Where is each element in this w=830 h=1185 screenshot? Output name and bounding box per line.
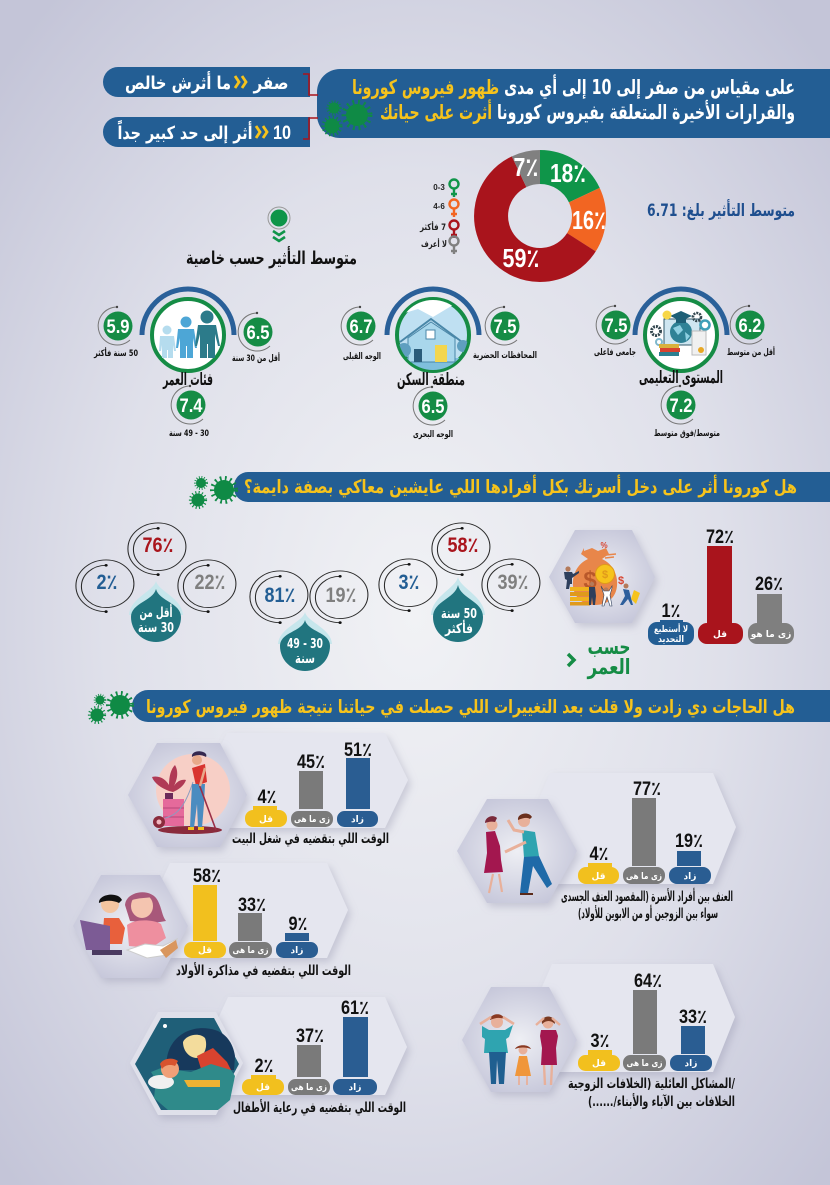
- stat: university: 7.5: [604, 316, 628, 337]
- bar: increased 33: 33٪: [679, 1007, 707, 1028]
- stat: upper egypt: 6.7: [350, 317, 372, 338]
- age group: 30 to 49: 81٪: [264, 584, 296, 607]
- stat: lower egypt: الوجه البحرى: [413, 430, 453, 440]
- stat: urban governorates: 7.5: [494, 317, 517, 338]
- bar: increased 19: زاد: [684, 872, 696, 882]
- bar: same 77: 77٪: [633, 779, 661, 800]
- stat: university: [594, 305, 636, 358]
- bar: increased 33: [670, 1007, 712, 1071]
- bar: cannot determine: لا أستطيع: [654, 623, 688, 635]
- icon: arguing family: [480, 1014, 560, 1085]
- icon: woman cleaning: [152, 751, 230, 834]
- bar: decreased 2: قل: [256, 1083, 270, 1093]
- donut chart: [491, 152, 606, 273]
- stat: intermediate: 7.2: [670, 396, 692, 417]
- stat: 30 to 49: 7.4: [180, 396, 203, 417]
- bar: same 37: زى ما هى: [291, 1083, 327, 1093]
- bar: decreased 4: قل: [592, 872, 606, 882]
- changes question banner: [90, 690, 830, 722]
- age group: under 30: 30 سنة: [138, 620, 174, 636]
- income bar chart: [648, 527, 794, 645]
- scale key: zero: [103, 67, 310, 97]
- icon: money hexagon: $: [583, 567, 597, 594]
- scale key: ten: 10: [273, 123, 291, 144]
- bar: decreased 4: قل: [259, 815, 273, 825]
- bar: same 37: 37٪: [296, 1026, 324, 1047]
- group: education: [594, 289, 775, 439]
- age group: 30 to 49: [250, 571, 368, 671]
- age group: 30 to 49: 30 - 49: [287, 636, 323, 652]
- group: education: المستوى التعليمى: [639, 368, 723, 388]
- donut legend: [419, 180, 458, 254]
- stat: 50 plus: 5.9: [106, 317, 130, 338]
- bar: same 37: [288, 1026, 330, 1095]
- bar: cannot determine: التحديد: [658, 635, 684, 645]
- by age label: العمر: [587, 655, 630, 679]
- icon: money hexagon: $: [618, 575, 624, 587]
- income question banner: [191, 472, 830, 507]
- bar: decreased 4: 4٪: [590, 844, 608, 865]
- panel: family problems: الخلافات بين الآباء والأبناء/......): [588, 1093, 735, 1110]
- heading: average impact by characteristic: [186, 207, 357, 269]
- main question banner: [303, 69, 830, 139]
- stat: 50 plus: 50 سنة فأكثر: [93, 347, 138, 359]
- bar: increased 19: 19٪: [675, 831, 703, 852]
- icon: mother and child studying: [80, 892, 178, 958]
- group: age: [93, 289, 280, 439]
- bar: same 45: زى ما هى: [294, 815, 330, 825]
- virus icons: [191, 478, 235, 507]
- bar: same: 26٪: [755, 574, 783, 595]
- icon: money hexagon: [549, 530, 655, 623]
- bar: increased 33: زاد: [685, 1059, 697, 1069]
- stat: lower egypt: 6.5: [422, 397, 445, 418]
- stat: intermediate: [654, 385, 720, 439]
- panel: family problems: [462, 964, 735, 1110]
- bar: decreased: قل: [713, 630, 727, 640]
- bar: same 77: [623, 779, 665, 884]
- by age label: حسب: [588, 635, 630, 659]
- stat: university: جامعى فاعلى: [594, 348, 636, 358]
- donut legend: لا أعرف: [421, 238, 447, 250]
- age group: under 30: أقل من: [140, 604, 172, 621]
- donut chart: 16٪: [572, 205, 606, 235]
- bar: same 64: 64٪: [634, 971, 662, 992]
- panel: childcare: الوقت اللي بتقضيه في رعاية الأطفال: [233, 1099, 406, 1116]
- age group: 50 plus: 3٪: [398, 571, 420, 594]
- bar: decreased 2: 2٪: [254, 1056, 274, 1077]
- scale key: zero: صفر: [253, 73, 288, 94]
- icon: violence scene: [484, 813, 552, 895]
- scale key: ten: أثر إلى حد كبير جداً: [117, 120, 253, 144]
- bar: same 77: زى ما هى: [626, 872, 662, 882]
- group: residence: منطقة السكن: [397, 370, 465, 390]
- stat: upper egypt: [341, 306, 381, 362]
- panel: housework: [128, 733, 408, 847]
- age group: 50 plus: فأكثر: [444, 620, 473, 637]
- age group: 50 plus: 39٪: [498, 571, 528, 594]
- bar: increased 51: [337, 740, 378, 827]
- age group: 30 to 49: 19٪: [326, 584, 356, 607]
- bar: cannot determine: 1٪: [662, 601, 680, 622]
- group: residence: [341, 289, 537, 440]
- stat: urban governorates: المحافظات الحضرية: [473, 351, 537, 361]
- age group: under 30: 22٪: [194, 571, 226, 594]
- icon: three people: [159, 310, 220, 358]
- donut legend: 7 فأكثر: [419, 221, 446, 233]
- donut chart: 7٪: [514, 152, 538, 182]
- bar: decreased: [698, 527, 743, 644]
- bar: same: زى ما هو: [750, 630, 791, 640]
- age group: 50 plus: 50 سنة: [441, 606, 477, 622]
- bar: decreased 3: [578, 1031, 620, 1071]
- bar: increased 61: زاد: [349, 1083, 361, 1093]
- panel: housework: الوقت اللي بتقضيه في شغل البيت: [232, 831, 389, 847]
- stat: 30 to 49: [169, 385, 209, 439]
- stat: upper egypt: الوجه القبلى: [343, 352, 381, 362]
- bar: same 33: زى ما هى: [232, 946, 268, 956]
- bar: increased 51: 51٪: [344, 740, 372, 761]
- bar: decreased 3: 3٪: [590, 1031, 610, 1052]
- stat: under 30: [232, 312, 280, 364]
- heading: average impact by characteristic: متوسط التأثير حسب خاصية: [186, 246, 357, 269]
- bar: same 64: زى ما هى: [626, 1059, 662, 1069]
- panel: children's study: [73, 863, 351, 979]
- stat: below intermediate: 6.2: [738, 316, 762, 337]
- age group: under 30: [76, 523, 236, 642]
- bar: same 33: 33٪: [238, 895, 266, 916]
- virus icons: [90, 694, 131, 722]
- icon: money hexagon: %: [600, 541, 608, 550]
- scale key: zero: ما أثرش خالص: [125, 71, 231, 94]
- stat: under 30: 6.5: [246, 323, 270, 344]
- donut chart: 18٪: [550, 158, 586, 188]
- bar: increased 9: [276, 914, 318, 958]
- panel: childcare: [130, 997, 407, 1116]
- by age label: [568, 635, 630, 679]
- bar: same 45: [291, 752, 333, 827]
- panel: children's study: الوقت اللي بتقضيه في مذاكرة الأولاد: [176, 962, 351, 979]
- bar: same 64: [623, 971, 666, 1071]
- bar: decreased 4: [578, 844, 619, 884]
- stat: below intermediate: أقل من متوسط: [727, 346, 775, 358]
- age group: 30 to 49: سنة: [295, 651, 315, 667]
- age group: 50 plus: [379, 523, 540, 642]
- stat: urban governorates: [473, 306, 537, 361]
- stat: intermediate: متوسط/فوق متوسط: [654, 429, 720, 439]
- bar: same 45: 45٪: [297, 752, 325, 773]
- donut chart: 59٪: [502, 243, 540, 273]
- bar: decreased 2: [242, 1056, 284, 1095]
- bar: same 33: [229, 895, 272, 958]
- bar: decreased: 72٪: [706, 527, 734, 548]
- bar: decreased 3: قل: [592, 1059, 606, 1069]
- age group: 50 plus: 58٪: [448, 534, 478, 557]
- panel: family violence: [457, 773, 736, 922]
- bar: cannot determine: [648, 601, 694, 645]
- stat: 50 plus: [93, 306, 138, 359]
- donut legend: 0-3: [433, 183, 445, 192]
- bar: increased 61: [333, 998, 377, 1095]
- icon: house: [399, 300, 468, 370]
- stat: 30 to 49: 30 - 49 سنة: [169, 429, 209, 439]
- bar: decreased 58: [184, 866, 226, 958]
- icon: money hexagon: $: [602, 569, 608, 581]
- bar: increased 61: 61٪: [341, 998, 369, 1019]
- bar: decreased 58: 58٪: [193, 866, 221, 887]
- stat: under 30: أقل من 30 سنة: [232, 352, 280, 364]
- bar: increased 9: 9٪: [288, 914, 308, 935]
- icon: mother and sleeping child: [135, 1018, 239, 1110]
- bar: increased 19: [669, 831, 711, 884]
- icon: education: [652, 310, 710, 356]
- group: age: فئات العمر: [162, 370, 213, 390]
- bar: same: [748, 574, 794, 644]
- age group: under 30: 76٪: [142, 534, 174, 557]
- bar: increased 51: زاد: [351, 815, 364, 825]
- bar: decreased 4: [245, 787, 287, 827]
- scale key: ten: [103, 117, 310, 147]
- bar: decreased 58: قل: [198, 946, 212, 956]
- age group: under 30: 2٪: [96, 571, 118, 594]
- bar: increased 9: زاد: [291, 946, 303, 956]
- panel: family problems: /المشاكل العائلية (الخلافات الزوجية: [568, 1076, 735, 1092]
- virus icons: [324, 102, 369, 134]
- stat: lower egypt: [413, 386, 453, 440]
- donut legend: 4-6: [433, 202, 445, 211]
- stat: below intermediate: [727, 305, 775, 358]
- bar: decreased 4: 4٪: [258, 787, 276, 808]
